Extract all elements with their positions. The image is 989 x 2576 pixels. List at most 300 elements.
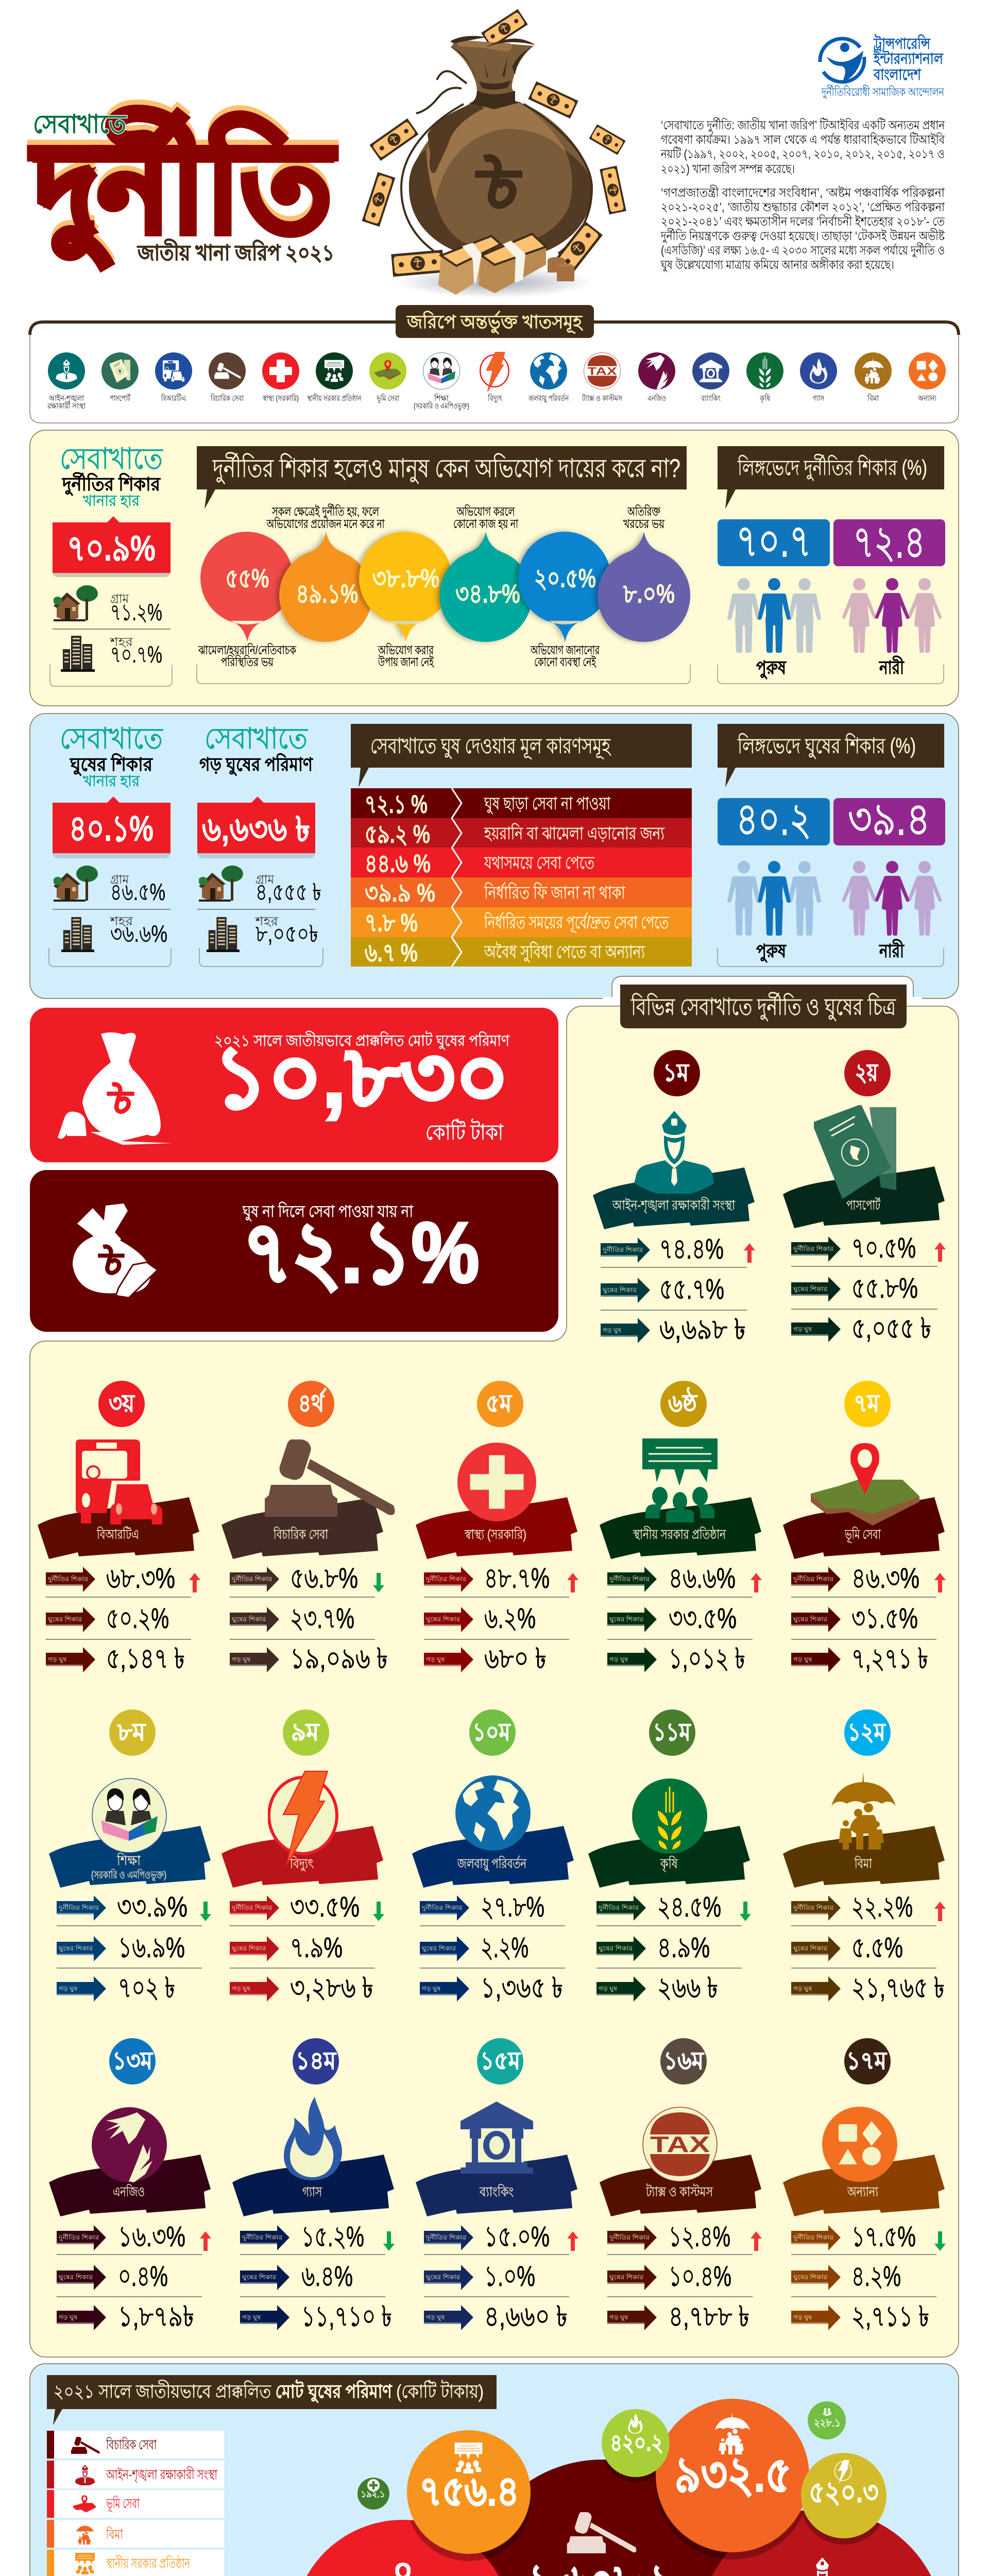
card: rank 8 education	[49, 1709, 211, 2004]
column heading: সেবাখাতে	[204, 722, 308, 755]
heading: estimated total bribes: ২০২১ সালে জাতীয়ভাবে প্রাক্কলিত মোট ঘুষের পরিমাণ (কোটি টাকায়)	[54, 2379, 484, 2403]
stat rows	[424, 2220, 578, 2332]
panel: bribery overview	[30, 714, 959, 998]
stat rows: ৪.২%	[851, 2260, 901, 2292]
stat rows: দুর্নীতির শিকার	[58, 2234, 99, 2242]
stat rows: ১৯,০৯৬ ৳	[290, 1642, 388, 1674]
heading: sectors: জরিপে অন্তর্ভুক্ত খাতসমূহ	[406, 310, 584, 334]
rank badge	[109, 2038, 156, 2084]
stat rows: ঘুষের শিকার	[793, 1285, 827, 1293]
title block	[30, 103, 335, 268]
column heading: ঘুষের শিকার	[69, 753, 153, 776]
icon row labels: ভূমি সেবা	[376, 394, 399, 403]
big number: ৭২.১%	[243, 1205, 479, 1300]
icon row labels: পাসপোর্ট	[110, 394, 131, 403]
ribbon with label: (সরকারি ও এমপিওভুক্ত)	[91, 1869, 166, 1882]
city rate	[61, 635, 162, 672]
ribbon with label: পাসপোর্ট	[846, 1197, 881, 1213]
ribbon with label: স্বাস্থ্য (সরকারি)	[464, 1527, 526, 1542]
village rate: ৪৬.৫%	[110, 878, 165, 905]
bubble: education: ২২৮.১	[814, 2416, 841, 2429]
stat rows: ২২.২%	[851, 1890, 913, 1923]
stat rows: দুর্নীতির শিকার	[421, 1904, 462, 1912]
stat rows: গড় ঘুষ	[793, 1656, 812, 1664]
stat rows	[420, 1890, 565, 2004]
ribbon with label	[412, 1826, 574, 1888]
bubble: local government: ৭৫৬.৪	[419, 2468, 519, 2514]
stat rows: দুর্নীতির শিকার	[242, 2234, 282, 2242]
panel: sector-wise cards background	[30, 1006, 959, 2357]
rank badge	[844, 2038, 891, 2084]
ribbon with label	[49, 1826, 211, 1888]
stat rows: ২৭.৮%	[481, 1890, 544, 1923]
reason labels: ঝামেলা/হয়রানি/নেতিবাচক	[198, 643, 297, 657]
reason labels: কোনো ব্যবস্থা নেই	[534, 655, 596, 669]
chart: reasons bubbles: ২০.৫%	[534, 564, 596, 594]
stat rows: ঘুষের শিকার	[425, 2274, 460, 2281]
rank badge	[477, 2038, 523, 2084]
table: reasons for bribery: হয়রানি বা ঝামেলা এড়ানোর জন্য	[484, 823, 665, 843]
stat rows: গড় ঘুষ	[426, 2314, 445, 2321]
village rate	[53, 866, 165, 905]
rank badge: ৫ম	[486, 1390, 513, 1417]
column heading: সেবাখাতে	[60, 442, 163, 476]
stat rows: ০.৪%	[118, 2260, 168, 2292]
rank badge	[844, 1709, 891, 1756]
stat rows: ৭০২ ৳	[118, 1971, 175, 2004]
reason labels: অভিযোগ করার	[378, 643, 434, 657]
table: reasons for bribery: ৭.৮ %	[365, 908, 418, 937]
ribbon with label: বিদ্যুৎ	[289, 1856, 314, 1872]
stat rows: গড় ঘুষ	[59, 1985, 77, 1993]
bubble: electricity	[801, 2453, 886, 2538]
stat rows	[791, 2220, 946, 2332]
logo tagline: দুর্নীতিবিরোধী সামাজিক আন্দোলন	[821, 85, 945, 99]
icon: flame	[284, 2097, 342, 2180]
logo text: বাংলাদেশ	[873, 66, 922, 83]
icon: land with pin	[811, 1443, 919, 1526]
icon row labels: বিআরটিএ	[161, 394, 186, 403]
intro text paragraph 1	[660, 117, 945, 176]
table: reasons for bribery	[351, 788, 692, 967]
card: rank 5 health	[416, 1381, 578, 1674]
stat rows: দুর্নীতির শিকার	[609, 1575, 650, 1583]
rank badge: ১১ম	[653, 1719, 691, 1746]
big number: ১০,৮৩০	[213, 1030, 509, 1125]
logo text	[873, 33, 944, 83]
reason labels: খরচের ভয়	[623, 517, 665, 531]
stat rows: গড় ঘুষ	[59, 2314, 77, 2321]
stat rows: ঘুষের শিকার	[609, 1616, 643, 1623]
people icons: male and female: পুরুষ	[756, 657, 787, 680]
stat rows: ঘুষের শিকার	[58, 1945, 93, 1953]
column heading: খানার হার	[83, 773, 140, 790]
stat rows: ১৬.৩%	[118, 2220, 185, 2252]
rank badge: ১০ম	[473, 1719, 511, 1746]
bubble: education	[808, 2401, 846, 2439]
village rate: গ্রাম	[110, 873, 129, 887]
stat rows: ঘুষের শিকার	[793, 2274, 827, 2281]
panel: sectors included in survey	[30, 305, 959, 423]
people icons: male and female: নারী	[878, 655, 905, 678]
stat rows: ১৬.৯%	[118, 1931, 185, 1963]
icon row labels: ব্যাংকিং	[701, 394, 721, 403]
stat rows: দুর্নীতির শিকার	[425, 1575, 466, 1583]
stat rows	[607, 2220, 762, 2332]
icon: police officer	[634, 1111, 714, 1196]
stat rows: দুর্নীতির শিকার	[793, 1575, 833, 1583]
stat rows: ঘুষের শিকার	[598, 1945, 633, 1953]
ribbon with label	[221, 1826, 383, 1888]
city rate: শহর	[110, 635, 133, 649]
village value	[198, 866, 321, 905]
city rate: ৭০.৭%	[110, 641, 162, 668]
chart: reasons bubbles: ৮.০%	[623, 579, 675, 609]
stat rows: ৫,০৫৫ ৳	[851, 1312, 931, 1344]
legend: sectors: স্থানীয় সরকার প্রতিষ্ঠান	[106, 2555, 190, 2571]
heading: main reasons for bribery: সেবাখাতে ঘুষ দেওয়ার মূল কারণসমূহ	[370, 734, 611, 759]
intro text paragraph 2: দুর্নীতি নিয়ন্ত্রণকে গুরুত্ব দেওয়া হয়েছে। তাছাড়া ‘টেকসই উন্নয়ন অভীষ্ট	[660, 228, 945, 243]
rank badge: ৭ম	[854, 1390, 880, 1417]
icon: bank	[461, 2102, 533, 2174]
ribbon with label: বিমা	[854, 1856, 872, 1871]
rank badge	[293, 2038, 339, 2084]
red value box: ৪০.১%	[69, 808, 154, 849]
village rate	[53, 585, 162, 625]
rank badge	[654, 1050, 700, 1096]
stat rows: ৪৮.৭%	[484, 1562, 550, 1594]
table: reasons for bribery: ৪৪.৬ %	[365, 849, 431, 878]
stat rows: দুর্নীতির শিকার	[598, 1904, 639, 1912]
intro text paragraph 2: ২০২১-২০২৫’, ‘জাতীয় শুদ্ধাচার কৌশল ২০১২’, ‘প্রেক্ষিত পরিকল্পনা	[661, 199, 945, 214]
stat rows	[230, 1562, 388, 1674]
icon: hands and bag	[73, 1204, 158, 1298]
ribbon with label	[783, 1826, 945, 1888]
bubble: local government	[407, 2430, 531, 2554]
logo icon	[820, 39, 864, 82]
title: main word: দুর্নীতি	[30, 108, 335, 268]
reason labels: পরিস্থিতির ভয়	[221, 655, 274, 669]
bubble: law enforcement	[698, 2509, 945, 2576]
rank badge: ১৬ম	[663, 2047, 705, 2075]
stat rows: ৬৮.৩%	[106, 1562, 175, 1594]
column heading	[199, 722, 313, 776]
legend: sectors: ভূমি সেবা	[106, 2496, 140, 2512]
heading: why people do not complain: দুর্নীতির শিকার হলেও মানুষ কেন অভিযোগ দায়ের করে না?	[212, 452, 680, 484]
bubble: judicial	[469, 2460, 735, 2576]
ribbon with label: ট্যাক্স ও কাস্টমস	[645, 2183, 713, 2199]
stat rows: গড় ঘুষ	[603, 1327, 621, 1334]
table: reasons for bribery: অবৈধ সুবিধা পেতে বা অন্যান্য	[484, 942, 645, 962]
rank badge	[844, 1381, 891, 1427]
intro text paragraph 2	[660, 185, 945, 272]
stat rows	[240, 2220, 395, 2332]
reason labels: কোনো কাজ হয় না	[453, 517, 519, 531]
rank badge: ৮ম	[117, 1719, 146, 1746]
rank badge: ১৩ম	[112, 2047, 154, 2075]
rank badge	[660, 1381, 707, 1427]
card: rank 13 NGO	[49, 2038, 211, 2332]
bubble: health	[357, 2478, 389, 2510]
heading: gender bribery: লিঙ্গভেদে ঘুষের শিকার (%)	[737, 733, 916, 759]
stat rows: ৩৩.৫%	[669, 1602, 737, 1634]
bubble: health: ১৯২.১	[361, 2489, 385, 2499]
stat rows: ঘুষের শিকার	[242, 2274, 276, 2281]
icon row labels: ট্যাক্স ও কাস্টমস	[582, 394, 623, 403]
icon row labels: গ্যাস	[813, 394, 825, 403]
stat rows	[57, 1890, 211, 2004]
ribbon with label: ব্যাংকিং	[479, 2184, 514, 2199]
ribbon with label: কৃষি	[660, 1856, 678, 1872]
rank badge	[660, 2038, 707, 2084]
stat rows: ২৬৬ ৳	[657, 1971, 718, 2004]
legend: sectors: বিমা	[106, 2527, 123, 2542]
stat rows: ২৪.৫%	[657, 1890, 721, 1923]
stat rows: ৫,১৪৭ ৳	[106, 1642, 185, 1674]
stat rows: ১০.৪%	[669, 2260, 731, 2292]
rank badge: ৬ষ্ঠ	[668, 1387, 698, 1417]
text: label: ঘুষ না দিলে সেবা পাওয়া যায় না	[242, 1201, 414, 1222]
stat rows: ৬,৬৯৮ ৳	[659, 1313, 746, 1345]
ribbon with label	[416, 2155, 577, 2216]
table: reasons for bribery: নির্ধারিত সময়ের পূর্বে/দ্রুত সেবা পেতে	[484, 912, 669, 934]
village value: ৪,৫৫৫ ৳	[255, 878, 321, 905]
stat rows: গড় ঘুষ	[599, 1985, 617, 1993]
rank badge: ৪র্থ	[298, 1387, 327, 1417]
panel: no service without bribe	[30, 1170, 558, 1332]
stat rows: ৫৫.৮%	[851, 1272, 918, 1304]
unit: কোটি টাকা	[425, 1118, 504, 1144]
icon row labels: শিক্ষা	[434, 394, 449, 403]
heading: gender corruption: লিঙ্গভেদে দুর্নীতির শিকার (%)	[737, 454, 927, 481]
stat rows: ঘুষের শিকার	[425, 1616, 460, 1623]
column heading: গড় ঘুষের পরিমাণ	[199, 753, 313, 776]
table: reasons for bribery: ৬.৭ %	[365, 938, 418, 967]
ribbon with label	[588, 1826, 750, 1888]
stat rows: ৫.৫%	[851, 1931, 903, 1963]
stat rows: ঘুষের শিকার	[793, 1616, 827, 1623]
ribbon with label: বিআরটিএ	[96, 1526, 139, 1542]
stat rows: ৬.৪%	[301, 2260, 353, 2292]
stat rows: ১১,৭১০ ৳	[301, 2300, 392, 2332]
legend: sectors: আইন-শৃঙ্খলা রক্ষাকারী সংস্থা	[106, 2466, 217, 2483]
ribbon with label	[600, 1497, 761, 1559]
stat rows: গড় ঘুষ	[793, 1326, 812, 1333]
stat rows: ১.০%	[484, 2260, 535, 2292]
stat rows: দুর্নীতির শিকার	[793, 1904, 833, 1912]
gender corruption values: ৭২.৪	[853, 516, 925, 567]
stat rows: ৭.৯%	[290, 1931, 343, 1963]
chart: reasons bubbles	[200, 532, 690, 642]
city rate	[61, 914, 167, 952]
rank badge: ১৫ম	[480, 2047, 521, 2075]
icon: speech board and people	[642, 1438, 718, 1522]
bubble: land	[293, 2520, 513, 2576]
card: rank 6 local government	[600, 1381, 762, 1674]
stat rows: গড় ঘুষ	[422, 1985, 440, 1993]
village rate: গ্রাম	[110, 592, 129, 606]
stat rows	[57, 2220, 211, 2332]
stat rows: ১৫.২%	[301, 2220, 364, 2252]
city rate: শহর	[110, 914, 133, 928]
ribbon with label	[600, 2155, 761, 2216]
rank badge	[477, 1381, 523, 1427]
stat rows: ১৫.০%	[484, 2220, 550, 2252]
stat column: average bribe	[197, 722, 321, 952]
stat rows: ঘুষের শিকার	[231, 1616, 266, 1623]
stat rows: ৪,৭৮৮ ৳	[669, 2300, 749, 2332]
intro text paragraph 2: ‘গণপ্রজাতন্ত্রী বাংলাদেশের সংবিধান’, ‘অষ্টম পঞ্চবার্ষিক পরিকল্পনা	[661, 185, 945, 200]
icon row labels: স্থানীয় সরকার প্রতিষ্ঠান	[307, 394, 362, 403]
people icons: male and female: পুরুষ	[756, 940, 787, 963]
ribbon with label: শিক্ষা	[116, 1853, 141, 1868]
logo: Transparency International Bangladesh	[820, 33, 945, 99]
title: main word shadow: দুর্নীতি	[30, 103, 335, 263]
icon: children with books	[92, 1778, 166, 1853]
icon row: sectors	[48, 352, 946, 392]
stat rows: ৬.২%	[484, 1602, 536, 1634]
stat rows: ২.২%	[481, 1931, 528, 1963]
icon: shapes	[822, 2107, 897, 2182]
stat rows: ঘুষের শিকার	[793, 1945, 827, 1953]
text: amount label: ২০২১ সালে জাতীয়ভাবে প্রাক্কলিত মোট ঘুষের পরিমাণ	[214, 1031, 510, 1050]
tab: sector heading: বিভিন্ন সেবাখাতে দুর্নীতি ও ঘুষের চিত্র	[630, 992, 896, 1021]
stat rows: ৫৬.৮%	[290, 1562, 358, 1594]
card: rank 10 climate change	[412, 1709, 574, 2004]
card: rank 16 tax and customs	[600, 2038, 762, 2332]
stat rows: ২৩.৭%	[290, 1602, 354, 1634]
stat rows: দুর্নীতির শিকার	[47, 1575, 88, 1583]
rank badge	[283, 1709, 329, 1756]
stat rows: দুর্নীতির শিকার	[609, 2234, 650, 2242]
reason labels: অভিযোগ জানানোর	[530, 643, 600, 657]
rank badge	[649, 1709, 695, 1756]
ribbon with label: ভূমি সেবা	[844, 1527, 881, 1543]
ribbon with label	[49, 2155, 211, 2216]
stat rows: ঘুষের শিকার	[58, 2274, 93, 2281]
gender bribery values: ৩৯.৪	[848, 793, 930, 844]
card: rank 2 passport	[783, 1050, 946, 1344]
stat rows: ১,৮৭৯৳	[118, 2300, 194, 2332]
card: rank 4 judicial	[221, 1381, 395, 1674]
people icons: male and female	[727, 578, 942, 680]
intro text paragraph 1: ২০২১) খানা জরিপ সম্পন্ন করেছে।	[661, 162, 795, 176]
stat rows: গড় ঘুষ	[793, 2314, 812, 2321]
stat rows: ঘুষের শিকার	[421, 1945, 456, 1953]
heading: estimated total bribes	[47, 2375, 497, 2425]
logo text: ইন্টারন্যাশনাল	[873, 49, 944, 67]
card: rank 11 agriculture	[588, 1709, 751, 2004]
bubble: insurance: ৯৩২.৫	[675, 2447, 791, 2502]
icon: umbrella and family	[831, 1772, 896, 1850]
stat column: households victim of corruption	[53, 442, 170, 672]
ribbon with label	[221, 1497, 383, 1559]
stat rows	[46, 1562, 200, 1674]
stat rows: ঘুষের শিকার	[47, 1616, 82, 1623]
rank badge: ১৪ম	[296, 2047, 337, 2075]
reason labels: অভিযোগ করলে	[456, 504, 515, 519]
red value box	[53, 796, 170, 858]
ribbon with label: আইন-শৃঙ্খলা রক্ষাকারী সংস্থা	[612, 1197, 735, 1213]
city value: শহর	[255, 914, 279, 928]
icon: passport	[811, 1103, 896, 1201]
stat rows: ৪৬.৬%	[669, 1562, 736, 1594]
table: reasons for bribery: ঘুষ ছাড়া সেবা না পাওয়া	[484, 794, 611, 814]
panel: total bribe amount	[30, 1008, 558, 1162]
icon row labels: অন্যান্য	[917, 394, 937, 403]
ribbon with label	[783, 1166, 945, 1228]
ribbon with label: জলবায়ু পরিবর্তন	[457, 1856, 526, 1872]
city rate: ৩৬.৬%	[110, 920, 167, 947]
column heading: সেবাখাতে	[60, 722, 163, 755]
red value box: ৬,৬৩৬ ৳	[202, 810, 310, 848]
bubble: insurance	[656, 2399, 809, 2552]
stat rows: ৪৬.৩%	[851, 1562, 919, 1594]
stat rows: ৪,৬৬০ ৳	[484, 2300, 568, 2332]
table: reasons for bribery: ৭২.১ %	[365, 790, 428, 819]
bubble: gas	[602, 2409, 670, 2477]
stat rows: ১,৩৬৫ ৳	[481, 1971, 563, 2004]
stat rows: গড় ঘুষ	[793, 1985, 812, 1993]
stat rows: ৩৩.৫%	[290, 1890, 360, 1923]
panel: corruption overview	[30, 430, 959, 706]
stat rows	[596, 1890, 751, 2004]
red value box	[53, 516, 170, 577]
stat rows: ৫০.২%	[106, 1602, 169, 1634]
stat rows	[791, 1562, 946, 1674]
icon: bag of money	[58, 1032, 173, 1145]
ribbon with label	[232, 2155, 394, 2216]
heading: gender corruption	[718, 446, 944, 509]
ribbon with label	[783, 2155, 945, 2216]
intro text paragraph 2: ২০২১-২০৪১’ এবং ক্ষমতাসীন দলের ‘নির্বাচনী ইশতেহার ২০১৮’- তে	[661, 214, 945, 229]
bubble shadows	[410, 2460, 881, 2561]
stat rows: ৫৫.৭%	[659, 1273, 724, 1305]
ribbon with label	[416, 1497, 577, 1559]
stat rows: দুর্নীতির শিকার	[231, 1575, 272, 1583]
stat rows: ৭৪.৪%	[659, 1232, 724, 1265]
stat rows: ৪.৯%	[657, 1931, 710, 1963]
column heading: খানার হার	[83, 493, 140, 510]
icon row labels: রক্ষাকারী সংস্থা	[47, 401, 86, 411]
ribbon with label: এনজিও	[113, 2184, 145, 2199]
ribbon with label	[38, 1497, 199, 1559]
stat rows: ১,০১২ ৳	[669, 1642, 745, 1674]
icon: tax seal	[643, 2107, 717, 2181]
stat rows: গড় ঘুষ	[232, 1656, 250, 1664]
rank badge: ৩য়	[109, 1390, 135, 1417]
icon: wheat	[632, 1778, 707, 1854]
intro text paragraph 2: ঘুষ উল্লেখযোগ্য মাত্রায় কমিয়ে আনার অঙ্গীকার করা হয়েছে।	[660, 257, 894, 272]
table: reasons for bribery: ৫৯.২ %	[365, 820, 430, 849]
card: rank 3 BRTA	[38, 1381, 200, 1674]
stat rows: গড় ঘুষ	[426, 1656, 445, 1664]
column heading	[60, 722, 163, 790]
icon row labels: এনজিও	[647, 394, 666, 403]
city value	[207, 914, 318, 952]
bubble: electricity: ৫২০.৩	[809, 2476, 879, 2509]
chart: reasons bubbles: ৫৫%	[226, 564, 269, 594]
chart: reasons bubbles: ৩৪.৮%	[455, 579, 520, 609]
heading: sectors	[396, 305, 594, 338]
stat rows: দুর্নীতির শিকার	[231, 1904, 272, 1912]
stat rows: গড় ঘুষ	[609, 2314, 628, 2321]
card: rank 15 banking	[416, 2038, 578, 2332]
card: rank 9 electricity	[221, 1709, 384, 2004]
stat rows: ৬৮০ ৳	[484, 1642, 547, 1674]
stat rows: ৩১.৫%	[851, 1602, 918, 1634]
ribbon with label: স্থানীয় সরকার প্রতিষ্ঠান	[633, 1526, 726, 1542]
